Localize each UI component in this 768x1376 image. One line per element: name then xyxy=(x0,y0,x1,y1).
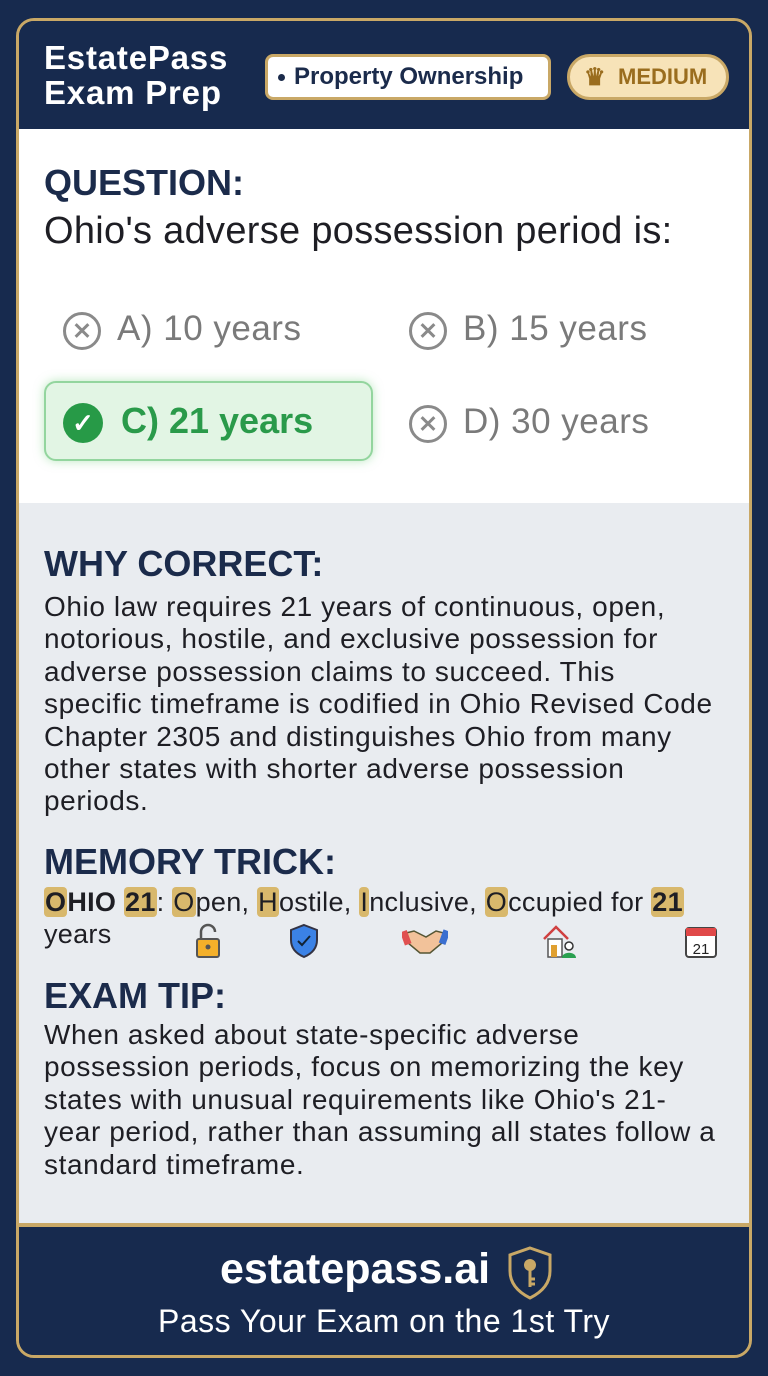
question text: Ohio's adverse possession period is: xyxy=(44,210,672,252)
exam tip text: possession periods, focus on memorizing the key xyxy=(44,1051,684,1082)
header xyxy=(19,21,749,129)
category tag xyxy=(265,54,551,100)
why correct text: periods. xyxy=(44,785,148,816)
memory trick text xyxy=(44,887,684,949)
brand title xyxy=(44,39,228,111)
exam tip text xyxy=(44,1019,715,1180)
footer divider xyxy=(19,1223,749,1227)
why correct text: specific timeframe is codified in Ohio Revised Code xyxy=(44,688,713,719)
brand title: Exam Prep xyxy=(44,74,222,111)
why correct text xyxy=(44,591,713,816)
exam tip text: year period, rather than assuming all states follow a xyxy=(44,1116,715,1147)
icon: handshake xyxy=(402,929,448,954)
check icon: ✓ xyxy=(72,408,94,438)
memory trick heading: MEMORY TRICK: xyxy=(44,841,336,882)
why correct heading: WHY CORRECT: xyxy=(44,543,323,584)
question heading: QUESTION: xyxy=(44,162,244,203)
why correct text: other states with shorter adverse possession xyxy=(44,753,624,784)
exam tip text: states with unusual requirements like Ohio's 21- xyxy=(44,1084,666,1115)
tagline: Pass Your Exam on the 1st Try xyxy=(158,1303,610,1339)
exam tip heading: EXAM TIP: xyxy=(44,975,226,1016)
icon: calendar xyxy=(685,927,717,958)
memory trick text: years xyxy=(44,919,112,949)
icon: lock xyxy=(196,924,220,958)
icon: shield key xyxy=(508,1246,552,1300)
explanation panel xyxy=(19,503,749,1223)
difficulty badge: MEDIUM xyxy=(618,64,707,89)
icon: shield xyxy=(290,924,318,958)
exam tip text: standard timeframe. xyxy=(44,1149,304,1180)
memory trick text: OHIO 21: Open, Hostile, Inclusive, Occupied for 21 xyxy=(45,887,683,917)
option B: B) 15 years xyxy=(463,309,647,348)
difficulty badge: ♛ xyxy=(584,64,606,91)
why correct text: notorious, hostile, and exclusive possession for xyxy=(44,623,658,654)
icons row xyxy=(196,924,717,958)
difficulty badge xyxy=(567,54,729,100)
icon: calendar: 21 xyxy=(693,941,709,958)
footer xyxy=(19,1227,749,1357)
footer brand: estatepass.ai xyxy=(220,1245,490,1293)
why correct text: Chapter 2305 and distinguishes Ohio from many xyxy=(44,721,672,752)
option C correct xyxy=(44,381,373,461)
exam tip text: When asked about state-specific adverse xyxy=(44,1019,579,1050)
brand title: EstatePass xyxy=(44,39,228,76)
why correct text: Ohio law requires 21 years of continuous, open, xyxy=(44,591,665,622)
option D: D) 30 years xyxy=(463,402,649,441)
option C correct: C) 21 years xyxy=(121,400,313,441)
option A: A) 10 years xyxy=(117,309,301,348)
icon: house person xyxy=(543,925,576,958)
category tag: Property Ownership xyxy=(294,63,523,90)
question panel xyxy=(19,129,749,503)
why correct text: adverse possession claims to succeed. This xyxy=(44,656,615,687)
check icon xyxy=(63,403,103,443)
